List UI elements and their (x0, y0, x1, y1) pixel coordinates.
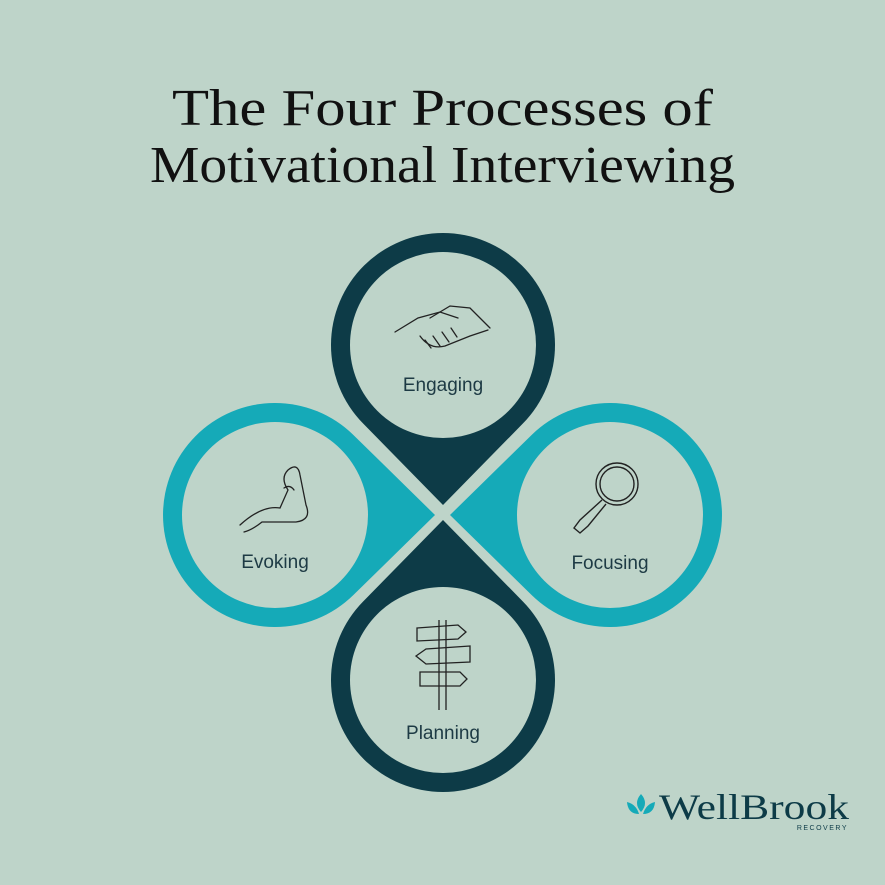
icon: handshake (395, 306, 490, 348)
label: evoking: Evoking (241, 552, 309, 573)
label: focusing: Focusing (571, 553, 649, 574)
icon: lotus (627, 794, 655, 814)
panel: planning drop (331, 520, 555, 792)
icon: magnifying glass (574, 463, 638, 533)
panel: focusing drop (450, 403, 722, 627)
icon: signpost (416, 620, 470, 710)
label: planning: Planning (406, 723, 480, 744)
label: engaging: Engaging (403, 375, 483, 396)
icon: flexed arm (240, 467, 308, 532)
logo: RECOVERY (797, 825, 848, 832)
logo: WellBrook (659, 787, 849, 827)
panel: engaging drop (331, 233, 555, 505)
title (150, 80, 735, 194)
panel: evoking drop (163, 403, 435, 627)
title: Motivational Interviewing (150, 137, 735, 194)
logo (627, 787, 849, 832)
title: The Four Processes of (172, 80, 714, 137)
